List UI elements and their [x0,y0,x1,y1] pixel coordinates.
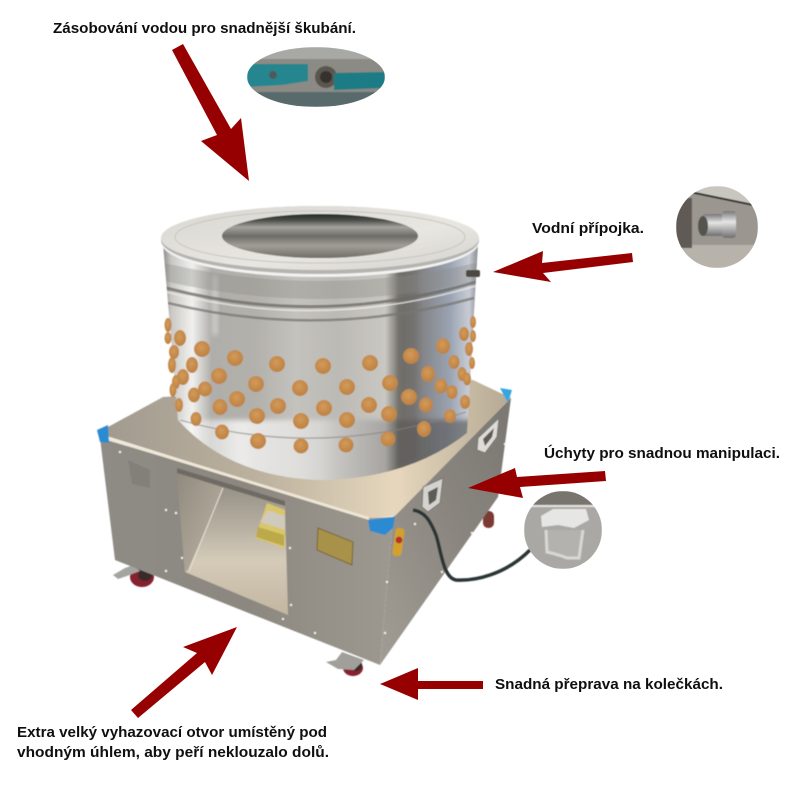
fitting bore [698,216,708,236]
base: top plate [97,380,511,518]
arrow: discharge opening [131,627,237,718]
bracket screw [269,71,277,79]
front carry handle [422,478,443,512]
arrow: water connector [493,251,633,282]
arrow: handles [468,468,606,498]
inset photo: water connector [676,186,758,268]
handle bracket [541,509,589,528]
label: handles: Úchyty pro snadnou manipulaci. [544,444,780,462]
handle loop [546,530,583,558]
label: wheels: Snadná přeprava na kolečkách. [495,676,723,693]
drum body [160,240,482,485]
warning sticker [255,503,285,548]
upper band [160,262,480,299]
chute opening [177,468,288,615]
label: water supply: Zásobování vodou pro snadnější škubání. [53,20,356,37]
rubber plucking fingers [164,316,476,454]
chute highlight [189,488,223,571]
left teal bracket [247,64,308,87]
drum lid [161,206,479,277]
inset photo: carry handle [524,491,602,569]
inset photo: water supply nozzle [247,47,385,107]
dark vertical streak [402,271,418,422]
drum ribs [166,282,476,307]
arrow: water supply [172,44,249,181]
chute top shadow [177,468,285,506]
water inlet [466,270,480,277]
emergency stop switch [392,528,405,557]
chute left wall [177,472,223,572]
arrow: wheels [380,668,483,700]
threaded fitting [702,214,724,236]
rear castor wheel [483,511,494,528]
makers logo [128,460,150,488]
panel rivets [119,443,506,634]
machine: poultry plucker [97,206,530,676]
blue corner protector: right [500,388,512,403]
base: front panel [100,438,393,665]
power cable [413,510,530,580]
base: right side panel [380,398,511,665]
centre hole [315,66,337,88]
label: discharge opening [17,724,329,761]
right teal bracket [334,72,385,90]
left castor wheel with brake [113,565,154,587]
blue corner protector: left [97,425,109,443]
blue corner protector: front [368,517,395,535]
base: plate edge shadow [108,437,369,520]
label: water connector: Vodní přípojka. [532,220,644,237]
drum opening [222,214,418,258]
label: discharge opening: Extra velký vyhazovací otvor umístěný pod [17,724,327,741]
label: discharge opening: vhodným úhlem, aby peří neklouzalo dolů. [17,744,329,761]
lower reflection [181,417,468,480]
rear carry handle [477,418,499,453]
front castor wheel with brake [326,652,364,676]
rating plate [317,528,353,565]
